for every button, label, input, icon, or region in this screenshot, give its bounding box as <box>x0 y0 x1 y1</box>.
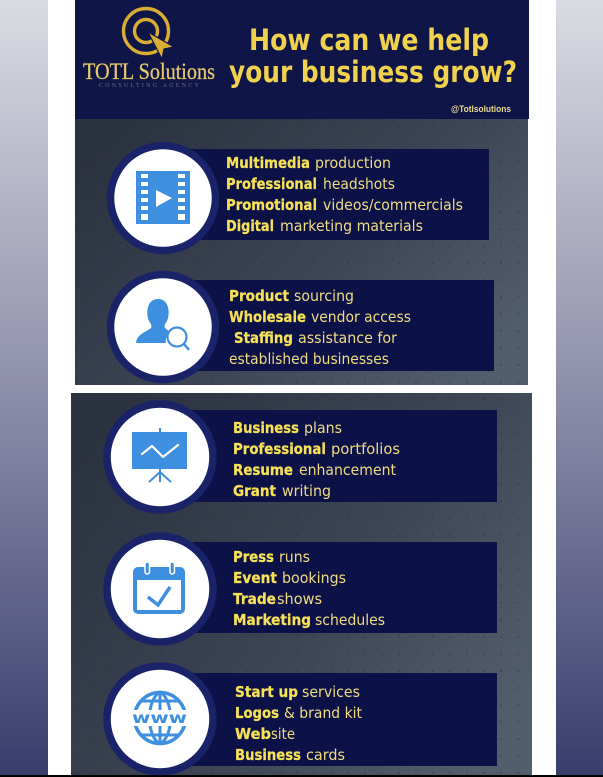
service list <box>235 683 362 764</box>
service list <box>226 154 463 235</box>
service list: Business <box>233 419 299 437</box>
service row 5: start up <box>107 666 497 772</box>
icon circle <box>107 666 213 772</box>
service row 1: multimedia <box>110 146 489 250</box>
logo: target and cursor <box>124 8 174 59</box>
service list <box>229 287 411 368</box>
service row 4: events <box>107 536 497 642</box>
service list: Staffing <box>234 329 293 347</box>
service list: enhancement <box>299 461 396 479</box>
icon circle <box>110 274 216 380</box>
service list: Promotional <box>226 196 317 214</box>
icon: person with magnifier <box>136 299 189 350</box>
text bar <box>160 673 497 766</box>
title <box>229 23 517 89</box>
service list: cards <box>306 746 345 764</box>
service list: Trade <box>233 590 276 608</box>
service list: production <box>315 154 391 172</box>
lower gray panel <box>71 393 532 776</box>
icon: film strip with play button <box>136 171 190 224</box>
header banner <box>75 0 529 119</box>
service list: Multimedia <box>226 154 310 172</box>
icon: presentation board with chart <box>132 428 187 482</box>
service list: marketing materials <box>280 217 423 235</box>
social handle: @Totlsolutions <box>451 104 511 114</box>
service list: Professional <box>226 175 317 193</box>
logo tagline: CONSULTING AGENCY <box>99 83 200 89</box>
title: your business grow? <box>229 55 517 89</box>
service list <box>233 548 385 629</box>
service row 2: sourcing <box>110 274 494 380</box>
service list: services <box>302 683 360 701</box>
service list: Start up <box>235 683 298 701</box>
service list: headshots <box>323 175 395 193</box>
service list: Press <box>233 548 274 566</box>
service list: Product <box>229 287 290 305</box>
service list: established businesses <box>229 350 389 368</box>
icon circle <box>107 536 213 642</box>
icon: calendar with check mark <box>133 562 185 614</box>
text bar <box>160 410 497 502</box>
left side background band <box>0 0 48 777</box>
icon: www globe: www <box>132 709 187 727</box>
service list: videos/commercials <box>323 196 463 214</box>
service list: assistance for <box>298 329 398 347</box>
text bar <box>163 280 494 371</box>
service list: vendor access <box>311 308 411 326</box>
service list: Professional <box>233 440 326 458</box>
service list: portfolios <box>331 440 400 458</box>
icon circle <box>107 404 213 510</box>
text bar <box>163 149 489 240</box>
service list: & brand kit <box>284 704 362 722</box>
service list: Grant <box>233 482 277 500</box>
service list: writing <box>282 482 331 500</box>
service list: Business <box>235 746 301 764</box>
service list: Marketing <box>233 611 311 629</box>
service list: Logos <box>235 704 279 722</box>
icon circle <box>110 146 216 250</box>
upper gray panel <box>75 119 528 385</box>
service list: Web <box>235 725 271 743</box>
service row 3: business plans <box>107 404 497 510</box>
service list: sourcing <box>294 287 354 305</box>
service list: Resume <box>233 461 293 479</box>
service list: Event <box>233 569 278 587</box>
service list: shows <box>277 590 322 608</box>
icon: www globe <box>130 692 190 744</box>
service list: site <box>271 725 295 743</box>
service list: bookings <box>282 569 346 587</box>
service list: Digital <box>226 217 274 235</box>
right side background band <box>556 0 603 777</box>
service list: Wholesale <box>229 308 306 326</box>
service list: schedules <box>315 611 385 629</box>
logo wordmark: TOTL Solutions <box>83 59 215 84</box>
service list: plans <box>304 419 342 437</box>
title: How can we help <box>249 23 489 57</box>
service list: runs <box>279 548 310 566</box>
service list <box>233 419 400 500</box>
text bar <box>160 542 497 633</box>
